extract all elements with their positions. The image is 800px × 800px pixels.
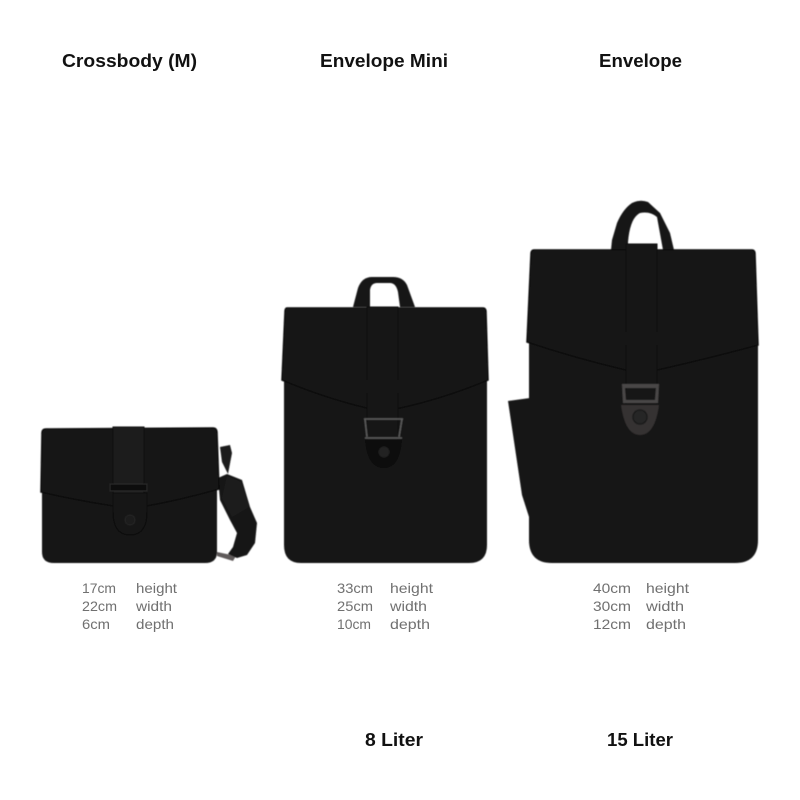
specs: Envelope Mini xyxy=(337,580,433,632)
strap xyxy=(367,307,398,441)
tab with snap xyxy=(365,439,402,468)
specs: Crossbody (M): 6cm xyxy=(82,616,110,632)
strap xyxy=(113,427,144,493)
specs: Envelope Mini: 25cm xyxy=(337,598,373,614)
bag: Envelope xyxy=(508,201,758,563)
specs: Envelope: 30cm xyxy=(593,598,631,614)
specs: Envelope Mini: height xyxy=(390,580,433,596)
buckle xyxy=(364,419,403,438)
specs: Crossbody (M): depth xyxy=(136,616,174,632)
specs: Envelope: 40cm xyxy=(593,580,631,596)
bag body xyxy=(529,340,758,563)
specs: Envelope Mini: 33cm xyxy=(337,580,373,596)
bag body xyxy=(42,485,217,563)
flap xyxy=(527,250,758,370)
volume: 15 Liter: 15 Liter xyxy=(607,730,673,750)
specs: Crossbody (M): width xyxy=(135,598,172,614)
specs: Crossbody (M): height xyxy=(136,580,177,596)
specs: Envelope: 12cm xyxy=(593,616,631,632)
heading: Envelope Mini: Envelope Mini xyxy=(320,51,448,71)
specs: Envelope Mini: 10cm xyxy=(337,616,371,632)
volume: 8 Liter: 8 Liter xyxy=(365,730,423,750)
buckle xyxy=(622,384,659,403)
specs: Envelope: depth xyxy=(646,616,686,632)
flap xyxy=(41,428,219,506)
specs: Envelope: width xyxy=(645,598,684,614)
specs: Crossbody (M) xyxy=(82,580,177,632)
heading: Crossbody (M): Crossbody (M) xyxy=(62,51,197,71)
specs: Envelope Mini: depth xyxy=(390,616,430,632)
specs: Envelope Mini: width xyxy=(389,598,427,614)
loop xyxy=(364,380,406,393)
handle xyxy=(353,277,415,307)
strap xyxy=(626,244,657,404)
specs: Envelope xyxy=(593,580,689,632)
bag body xyxy=(284,375,487,563)
bag: Crossbody (M) xyxy=(41,427,257,563)
loop xyxy=(617,332,665,345)
specs: Envelope: height xyxy=(646,580,689,596)
buckle xyxy=(110,484,147,491)
tab with snap xyxy=(621,405,659,435)
specs: Crossbody (M): 22cm xyxy=(82,598,117,614)
specs: Crossbody (M): 17cm xyxy=(82,580,116,596)
flap xyxy=(282,308,488,408)
side pocket xyxy=(508,398,530,520)
tab with snap xyxy=(113,493,147,535)
handle xyxy=(611,201,674,250)
bag: Envelope Mini xyxy=(282,277,488,563)
shoulder strap and clip xyxy=(217,445,257,561)
heading: Envelope: Envelope xyxy=(599,51,682,71)
